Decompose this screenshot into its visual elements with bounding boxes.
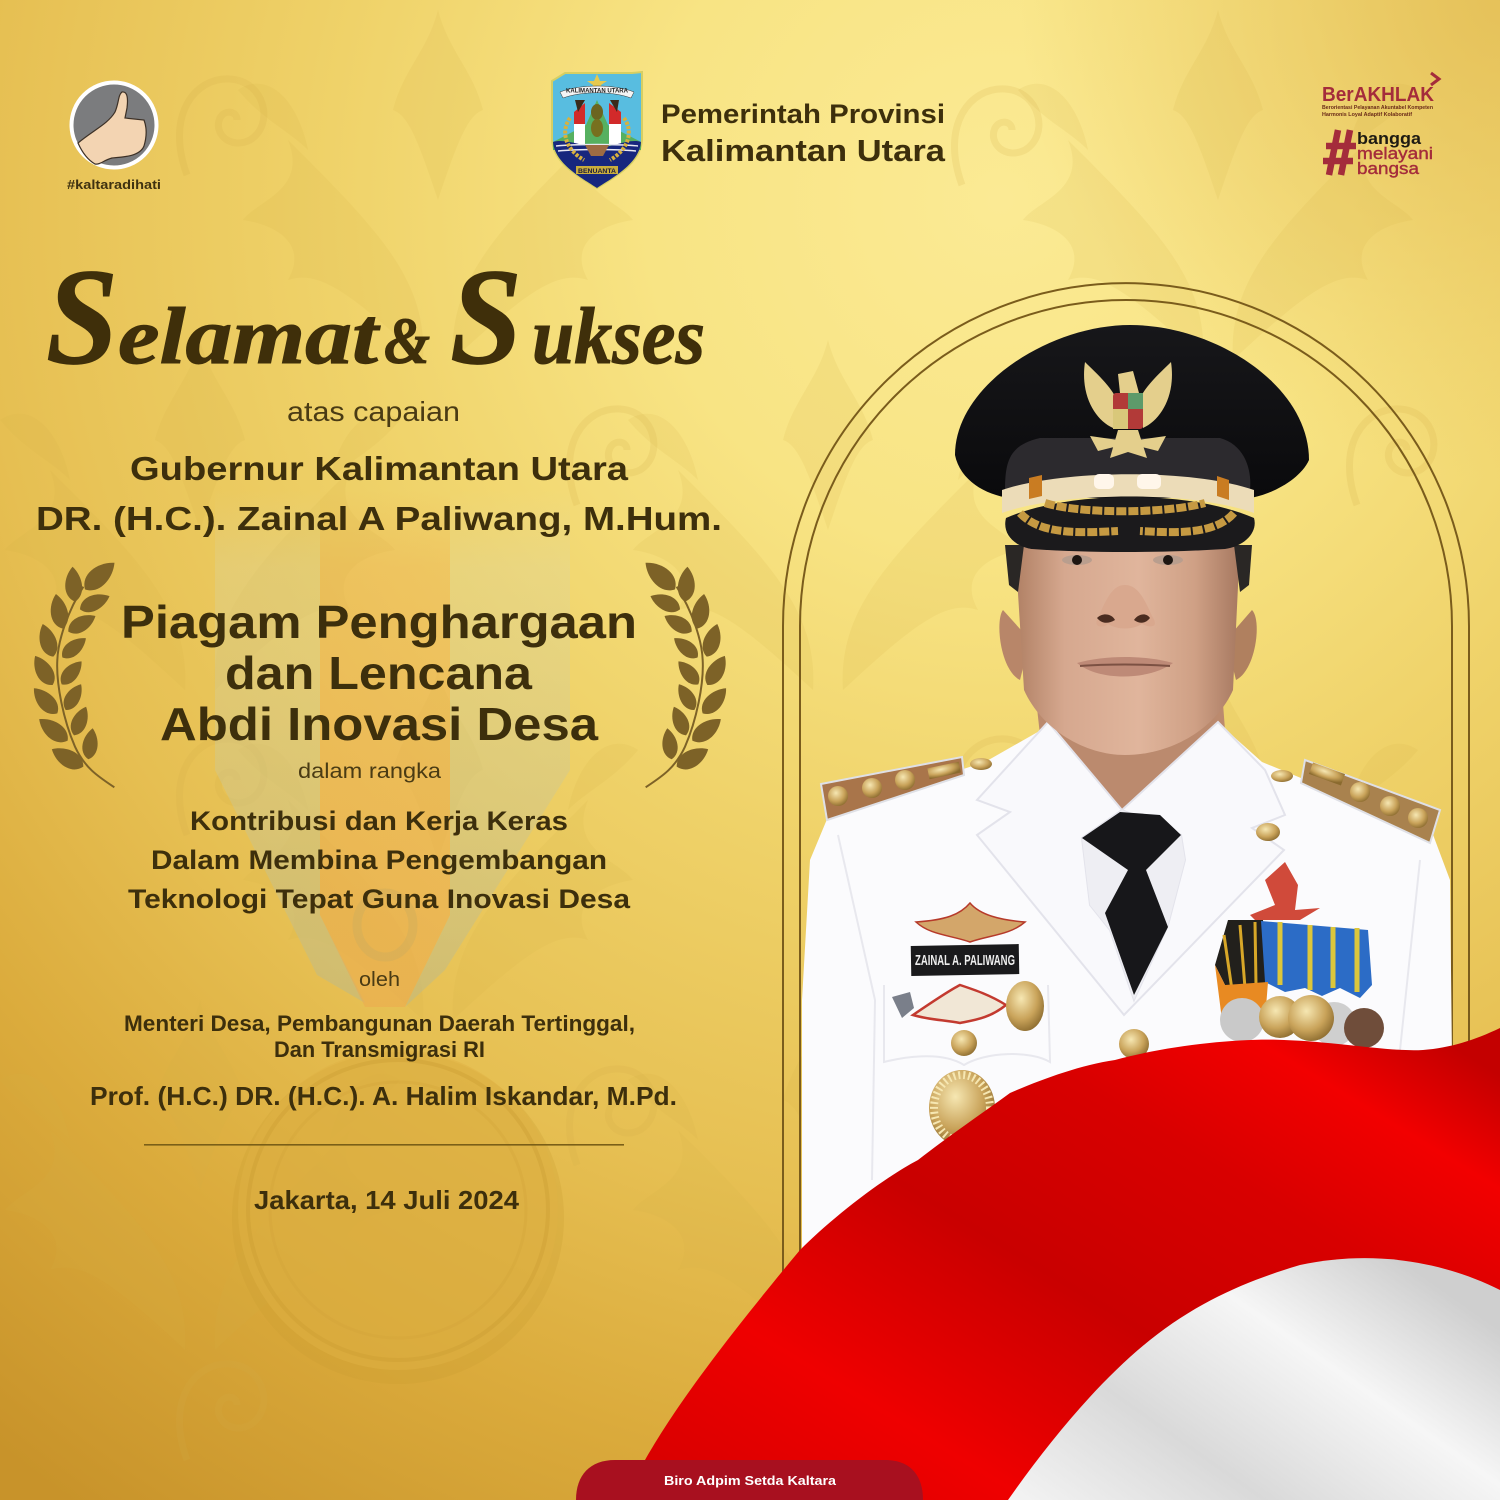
portrait of the governor (802, 325, 1452, 1300)
header: pemerintah provinsi: Kalimantan Utara (661, 133, 946, 168)
gold star badge (929, 1070, 995, 1146)
red badge (1250, 862, 1320, 920)
ribbon blue stripes (1280, 922, 1357, 992)
text: dalam rangka: dalam rangka (298, 760, 441, 783)
award title: dan Lencana (225, 647, 532, 699)
cap cord (1002, 474, 1254, 513)
medals (1220, 995, 1384, 1048)
face (999, 545, 1257, 755)
logo: bangga melayani bangsa: melayani (1357, 144, 1433, 163)
header: pemerintah provinsi (661, 99, 946, 168)
pocket flap (884, 985, 1050, 1065)
visor gold leaves (1020, 503, 1234, 532)
heading: Selamat & Sukses: elamat (118, 293, 381, 381)
gold wing badge (916, 903, 1025, 942)
shield navy waves (553, 141, 641, 188)
uniform jacket (802, 720, 1452, 1300)
Indonesian flag: white band (1008, 1258, 1500, 1500)
lapels and shirt (977, 722, 1285, 1015)
shield wave stripes (556, 144, 638, 151)
award title: Abdi Inovasi Desa (160, 698, 598, 750)
award title (121, 596, 637, 750)
lapel pin (1256, 823, 1280, 841)
contribution statement: Teknologi Tepat Guna Inovasi Desa (128, 884, 631, 914)
shirt front (1082, 810, 1185, 1000)
logo: bangga melayani bangsa (1323, 129, 1433, 178)
shield motto: BENUANTA (578, 168, 616, 175)
header: pemerintah provinsi: Pemerintah Provinsi (661, 99, 945, 129)
cap cord highlights (1094, 474, 1161, 489)
shield central emblem (585, 104, 609, 156)
lip line (1080, 664, 1170, 666)
heading: Selamat & Sukses: & (384, 305, 430, 378)
text: governor name: DR. (H.C.). Zainal A Paliwang, M.Hum. (36, 500, 722, 537)
minister title (124, 1011, 635, 1062)
contribution statement (128, 806, 631, 914)
contribution statement: Dalam Membina Pengembangan (151, 845, 607, 875)
contribution statement: Kontribusi dan Kerja Keras (190, 806, 568, 836)
oval medal (1006, 981, 1044, 1031)
logo: BerAKHLAK: Harmonis Loyal Adaptif Kolaboratif (1322, 112, 1412, 118)
ribbon bar blue (1261, 921, 1372, 998)
logo: BerAKHLAK: Berorientasi Pelayanan Akuntabel Kompeten (1322, 105, 1433, 111)
shoulder buttons (970, 758, 1293, 782)
icon: thumbs up badge (72, 82, 156, 168)
neck (1035, 690, 1225, 812)
shield birds (575, 100, 619, 112)
footer tab (576, 1460, 923, 1500)
cap cord buttons (1029, 475, 1229, 500)
minister title: Dan Transmigrasi RI (274, 1037, 485, 1062)
name tag: ZAINAL A. PALIWANG (915, 952, 1015, 969)
shield rice and cotton (565, 118, 629, 160)
logo: bangga melayani bangsa: bangsa (1357, 159, 1420, 178)
text: place and date: Jakarta, 14 Juli 2024 (254, 1185, 520, 1215)
icon: right laurel (639, 555, 732, 787)
text: governor name (36, 450, 722, 537)
text: oleh: oleh (359, 969, 400, 991)
red wing badge (913, 985, 1006, 1023)
orange ribbon (1215, 965, 1268, 1020)
text: governor name: Gubernur Kalimantan Utara (130, 450, 629, 487)
nostrils (1097, 614, 1150, 623)
footer tab: Biro Adpim Setda Kaltara (664, 1473, 837, 1488)
epaulet left (821, 757, 964, 820)
shield banner: KALIMANTAN UTARA (566, 88, 629, 94)
minister title: Menteri Desa, Pembangunan Daerah Tertinggal, (124, 1011, 635, 1036)
text: atas capaian: atas capaian (287, 396, 460, 427)
name tag (911, 944, 1019, 976)
logo: BerAKHLAK: BerAKHLAK (1322, 84, 1435, 106)
heading: Selamat & Sukses: ukses (532, 293, 705, 381)
minister name: Prof. (H.C.) DR. (H.C.). A. Halim Iskandar, M.Pd. (90, 1081, 677, 1111)
jacket sleeve shading (838, 835, 1420, 1180)
eyes (1062, 555, 1183, 565)
faint medal watermark (215, 490, 570, 1384)
cap eagle emblem (1084, 362, 1172, 458)
arch frame (783, 283, 1469, 1300)
ribbon black stripes (1224, 922, 1256, 990)
nose (1096, 585, 1155, 628)
shield green field (553, 100, 641, 150)
Indonesian flag: red band (640, 1028, 1500, 1500)
logo: BerAKHLAK (1322, 73, 1439, 118)
mouth (1077, 657, 1173, 677)
epaulet right (1301, 760, 1440, 843)
shield star (587, 74, 607, 91)
tie (1082, 812, 1181, 995)
small pin (892, 992, 914, 1018)
hashtag kaltaradihati: #kaltaradihati (67, 177, 161, 192)
icon: provincial coat of arms (552, 72, 642, 188)
heading: Selamat & Sukses: S (450, 240, 522, 393)
shield red-white flags (574, 103, 621, 144)
ribbon bar black (1215, 920, 1268, 992)
cap band (1005, 438, 1250, 490)
icon: left laurel (28, 555, 121, 787)
buttons (951, 1029, 1149, 1059)
hair sides (1005, 545, 1252, 592)
cap crown (955, 325, 1309, 498)
heading: Selamat & Sukses (46, 240, 705, 393)
heading: Selamat & Sukses: S (46, 240, 118, 393)
cap visor (1005, 497, 1255, 552)
award title: Piagam Penghargaan (121, 596, 637, 648)
logo: bangga melayani bangsa: bangga (1357, 129, 1422, 148)
